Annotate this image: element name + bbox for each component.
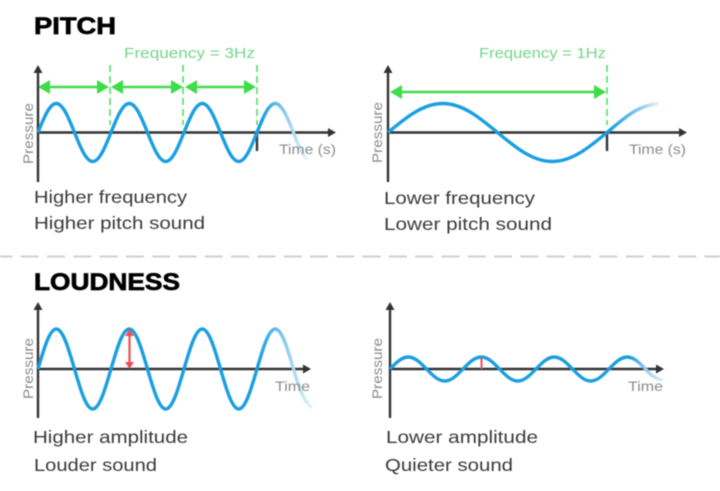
label: frequency 1Hz: Frequency = 1Hz: [479, 46, 606, 62]
red amplitude arrow: [125, 329, 134, 369]
caption: Lower pitch sound: [384, 214, 552, 234]
period markers: [110, 65, 257, 125]
sine wave: high amplitude: [38, 329, 312, 409]
axes: [384, 65, 687, 182]
caption: [385, 427, 538, 475]
axis label: time: Time (s): [279, 141, 336, 157]
panel: pitch, higher frequency: [20, 13, 336, 233]
axes: [386, 302, 664, 418]
caption: [33, 427, 188, 475]
caption: Higher pitch sound: [34, 213, 205, 233]
sine wave: low amplitude: [390, 357, 663, 381]
axis label: time: Time (s): [629, 141, 686, 157]
heading: pitch: PITCH: [34, 13, 116, 40]
axis label: pressure: Pressure: [20, 103, 36, 164]
panel: loudness, lower amplitude: [369, 302, 664, 475]
green period arrows: [38, 80, 256, 94]
panel: pitch, lower frequency: [369, 46, 687, 234]
period marker: [606, 65, 608, 125]
caption: [384, 188, 552, 234]
red amplitude marker: [480, 357, 482, 369]
label: frequency 3Hz: Frequency = 3Hz: [124, 46, 255, 62]
axis label: pressure: Pressure: [369, 102, 385, 163]
axis label: time: Time: [275, 378, 310, 394]
axis label: pressure: Pressure: [20, 338, 36, 399]
axis label: pressure: Pressure: [369, 338, 385, 399]
axes: [34, 302, 311, 418]
caption: Higher amplitude: [33, 427, 188, 447]
caption: Louder sound: [34, 455, 157, 475]
green period arrow: [390, 85, 606, 99]
sine wave: 3Hz: [38, 104, 307, 162]
caption: [34, 187, 205, 233]
sine wave: 1Hz: [388, 104, 659, 162]
caption: Higher frequency: [34, 187, 187, 207]
axis label: time: Time: [628, 378, 663, 394]
caption: Lower frequency: [384, 188, 535, 208]
heading: loudness: LOUDNESS: [34, 269, 180, 296]
axes: [34, 65, 336, 182]
panel: loudness, higher amplitude: [20, 269, 312, 475]
caption: Lower amplitude: [386, 427, 538, 447]
caption: Quieter sound: [385, 455, 513, 475]
